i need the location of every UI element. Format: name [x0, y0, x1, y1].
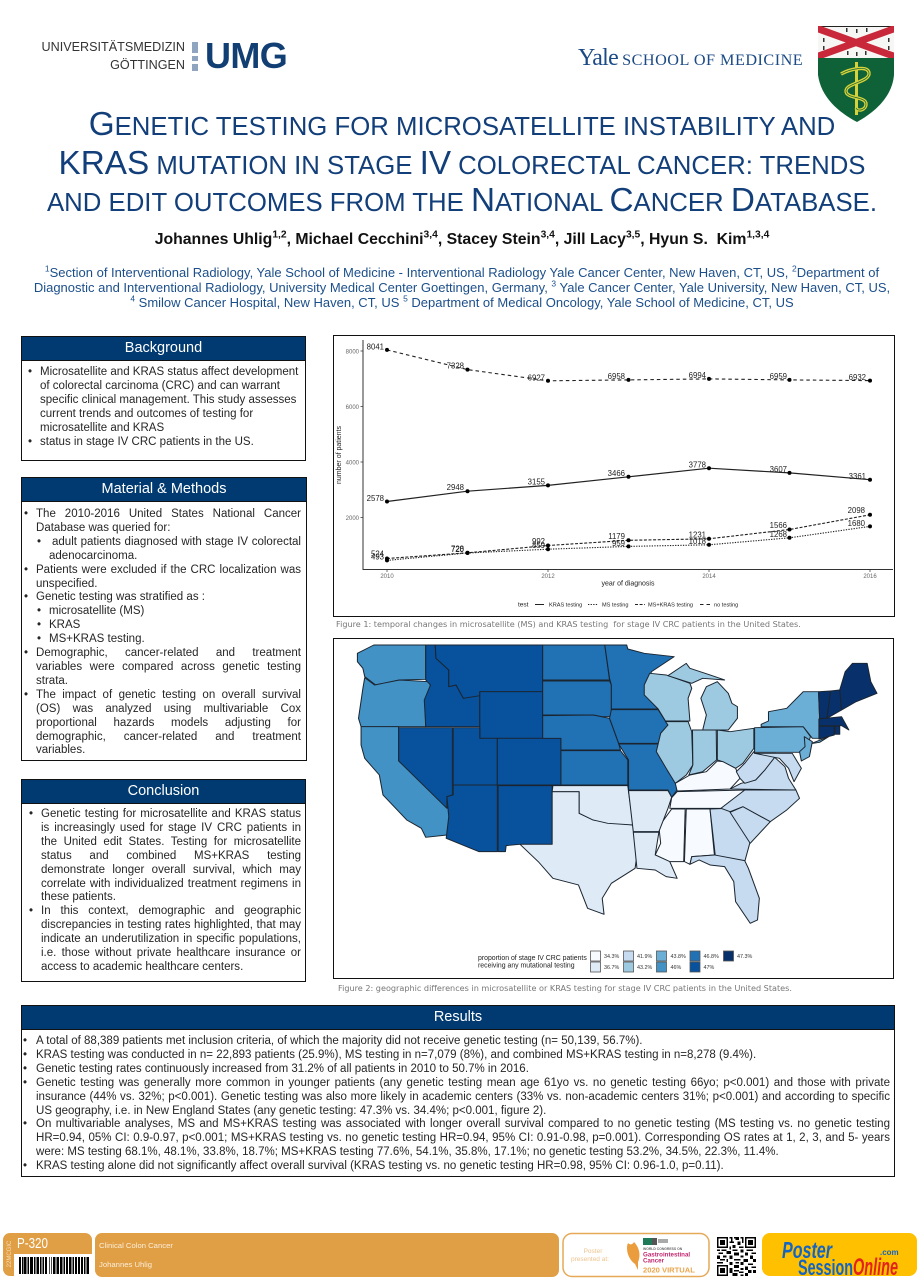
panel: background: [21, 336, 306, 461]
text: methods bullets: proportional hazards models adjusting for: [36, 717, 301, 729]
affiliations: 1Section of Interventional Radiology, Yale School of Medicine - Interventional Radiology Yale Cancer Center, New Haven, CT, US, 2Department of: [45, 264, 879, 280]
text: background bullets: microsatellite and KRAS: [40, 422, 164, 434]
states: 36.7% tier: [520, 786, 677, 914]
chart: testing trends: 2012: [541, 574, 555, 580]
series: KRAS testing: 2948: [447, 483, 464, 492]
text: conclusion bullets: In this context, demographic and geographic: [41, 905, 301, 917]
text: methods bullets: Patients were excluded if the CRC localization was: [36, 564, 301, 576]
text: results bullets: were: MS testing 68.1%, 48.1%, 33.8%, 18.7%; MS+KRAS testing 77.6%, 54.1%, 35.8%, 17.1%; no genetic testing 53.2%, 34.5%, 22.3%, 11.4%.: [36, 1146, 779, 1158]
axis title: x: year of diagnosis: [602, 580, 655, 588]
text: conclusion bullets: status and combined MS+KRAS testing: [41, 850, 301, 862]
chart: testing trends: [336, 340, 893, 608]
panel: material and methods: •: [24, 591, 28, 603]
text: background bullets: of colorectal carcinoma (CRC) and can warrant: [40, 380, 280, 392]
footer: session and author bar: [95, 1233, 559, 1277]
states: 46% tier: [357, 645, 451, 837]
series: MS+KRAS testing: 1231: [689, 530, 706, 540]
series: MS testing: 859: [532, 541, 545, 550]
footer: PosterSessionOnline logo: .com: [880, 1248, 899, 1257]
series: MS testing: 720: [451, 545, 465, 554]
series: MS+KRAS testing: 728: [451, 544, 464, 554]
text: results bullets: insurance (44% vs. 32%; p<0.001). Genetic testing was also more likely in academic centers (33% vs. non-academic centers 31%; p<0.001) and according to specific: [36, 1091, 890, 1103]
panel: material and methods: •: [24, 508, 28, 520]
title: AND EDIT OUTCOMES FROM THE NATIONAL CANCER DATABASE.: [47, 182, 877, 219]
text: conclusion bullets: i.e. those without private healthcare insurance or: [41, 947, 301, 959]
legend: map scale: 36.7%: [604, 965, 619, 971]
footer: congress badge: presented at:: [571, 1256, 609, 1263]
text: methods bullets: microsatellite (MS): [49, 605, 144, 617]
series: no testing: 8041: [367, 342, 384, 352]
heading: conclusion: [22, 780, 305, 804]
heading: background: [22, 337, 305, 361]
title: GENETIC TESTING FOR MICROSATELLITE INSTABILITY AND: [89, 106, 835, 143]
panel: results: [21, 1005, 895, 1177]
text: conclusion bullets: discrepancies in testing rates highlighted, that may: [41, 919, 301, 931]
text: methods bullets: •: [37, 619, 41, 631]
text: conclusion bullets: these patients.: [41, 891, 116, 903]
panel: conclusion: [21, 779, 306, 982]
text: conclusion bullets: indicate an underutilization in specific populations,: [41, 933, 301, 945]
text: methods bullets: Database was queried for:: [36, 522, 170, 534]
affiliations: 4 Smilow Cancer Hospital, New Haven, CT, US 5 Department of Medical Oncology, Yale School of Medicine, CT, US: [130, 294, 794, 310]
panel: background: •: [28, 366, 32, 378]
text: methods bullets: [24, 508, 301, 756]
panel: results: •: [23, 1049, 27, 1061]
series: MS testing: 1680: [848, 519, 866, 528]
chart: testing trends: 2014: [702, 574, 716, 580]
series: no testing: 6959: [770, 372, 787, 381]
legend: map scale: 43.2%: [637, 965, 652, 971]
states: 46.8% tier: [543, 645, 677, 797]
title: KRAS MUTATION IN STAGE IV COLORECTAL CANCER: TRENDS: [58, 145, 865, 182]
authors: Johannes Uhlig1,2, Michael Cecchini3,4, Stacey Stein3,4, Jill Lacy3,5, Hyun S. Kim1,3,4: [155, 230, 769, 248]
icon: Yale shield: [818, 26, 894, 122]
footer: poster id tab: [3, 1233, 92, 1276]
footer: congress badge: [562, 1232, 710, 1278]
text: conclusion bullets: the United edit States. Testing for microsatellite: [41, 836, 301, 848]
panel: results: •: [23, 1118, 27, 1130]
logo: Yale School of Medicine: Yale SCHOOL OF MEDICINE: [578, 45, 803, 71]
text: methods bullets: variables.: [36, 744, 85, 756]
heading: material and methods: Material & Methods: [102, 481, 226, 497]
chart: testing trends: 2016: [863, 574, 877, 580]
logo: UMG: [42, 35, 287, 76]
footer: congress badge: WORLD CONGRESS ON: [643, 1247, 683, 1251]
legend: line types: test: [518, 602, 529, 608]
legend: map scale: 46.8%: [704, 954, 719, 960]
chart: testing trends: 2000: [346, 516, 360, 522]
heading: material and methods: [22, 478, 306, 502]
text: methods bullets: The 2010-2016 United States National Cancer: [36, 508, 301, 520]
text: methods bullets: The impact of genetic testing on overall survival: [36, 689, 301, 701]
panel: background: •: [28, 436, 32, 448]
states: 47.3% tier: [819, 663, 877, 739]
legend: line types: KRAS testing: [549, 602, 582, 608]
panel: results: •: [23, 1035, 27, 1047]
footer: congress badge: Cancer: [643, 1258, 665, 1264]
panel: results: •: [23, 1160, 27, 1172]
text: methods bullets: demographic, cancer-related and treatment: [36, 730, 301, 742]
series: KRAS testing: 3155: [528, 478, 546, 486]
series: MS+KRAS testing: [371, 506, 872, 560]
text: results bullets: Genetic testing rates continuously increased from 31.2% of all patients in 2010 to 50.7% in 2016.: [36, 1063, 529, 1075]
text: methods bullets: unspecified.: [36, 578, 97, 590]
heading: conclusion: Conclusion: [128, 783, 199, 799]
text: methods bullets: variables were compared across genetic testing: [36, 661, 301, 673]
panel: material and methods: •: [24, 689, 28, 701]
text: methods bullets: strata.: [36, 675, 68, 687]
series: MS+KRAS testing: 992: [532, 537, 545, 546]
series: no testing: 6994: [689, 371, 707, 380]
legend: line types: MS+KRAS testing: [648, 602, 693, 608]
text: conclusion bullets: Genetic testing for microsatellite and KRAS status: [41, 808, 301, 820]
series: MS testing: [371, 519, 872, 562]
axis title: y: number of patients: [336, 426, 343, 484]
logo: UMG: UNIVERSITÄTSMEDIZIN: [42, 40, 185, 54]
caption: figure 2: Figure 2: geographic differences in microsatellite or KRAS testing for stage IV CRC patients in the United States.: [338, 983, 792, 993]
series: KRAS testing: [367, 460, 872, 504]
footer: session and author bar: Clinical Colon Cancer: [99, 1241, 173, 1250]
series: MS testing: 493: [371, 552, 384, 562]
text: methods bullets: adult patients diagnosed with stage IV colorectal: [52, 536, 301, 548]
panel: material and methods: [21, 477, 307, 761]
text: methods bullets: Genetic testing was stratified as :: [36, 591, 205, 603]
states: 43.2% tier: [644, 663, 754, 783]
series: KRAS testing: 3361: [849, 472, 866, 481]
heading: results: [22, 1006, 894, 1030]
states: 41.9% tier: [690, 752, 801, 923]
panel: material and methods: •: [24, 564, 28, 576]
text: background bullets: status in stage IV CRC patients in the US.: [40, 436, 254, 448]
text: methods bullets: •: [37, 605, 41, 617]
chart: testing trends: 4000: [346, 460, 360, 466]
series: MS testing: 959: [612, 539, 625, 548]
series: KRAS testing: 3778: [689, 460, 706, 470]
states: 34.3% tier: [655, 761, 747, 864]
text: poster number: P-320: [17, 1236, 48, 1252]
caption: figure 1: Figure 1: temporal changes in microsatellite (MS) and KRAS testing for stage IV CRC patients in the United States.: [336, 619, 801, 629]
chart: testing trends: 2010: [380, 574, 394, 580]
legend: map scale: 46%: [670, 965, 681, 971]
panel: conclusion: •: [29, 905, 33, 917]
text: methods bullets: MS+KRAS testing.: [49, 633, 145, 645]
panel: map figure 2: [333, 638, 894, 979]
legend: map scale: 34.3%: [604, 954, 619, 960]
series: MS+KRAS testing: 1566: [770, 521, 787, 530]
states: 47% tier: [399, 645, 561, 852]
footer: PosterSessionOnline logo: [762, 1233, 917, 1277]
text: conclusion bullets: correlate with individualized treatment regimens in: [41, 878, 301, 890]
legend: map scale: proportion of stage IV CRC patients: [478, 955, 587, 962]
panel: results: •: [23, 1063, 27, 1075]
series: no testing: 6932: [849, 373, 866, 382]
text: methods bullets: adenocarcinoma.: [49, 550, 137, 562]
text: background bullets: specific clinical management. This study assesses: [40, 394, 296, 406]
series: MS testing: 1018: [689, 537, 706, 546]
series: MS+KRAS testing: 1179: [608, 532, 625, 541]
panel: line chart figure 1: [333, 335, 895, 617]
text: background bullets: [28, 366, 298, 448]
text: conclusion bullets: demonstrate longer overall survival, which may: [41, 864, 301, 876]
footer: congress badge: Poster: [584, 1248, 603, 1255]
legend: line types: no testing: [714, 602, 738, 608]
legend: map scale: [478, 951, 752, 972]
legend: map scale: 47%: [704, 965, 714, 971]
panel: conclusion: •: [29, 808, 33, 820]
icon: wheat leaf: [627, 1242, 639, 1270]
affiliations: Diagnostic and Interventional Radiology, University Medical Center Goettingen, Germany, 3 Yale Cancer Center, Yale University, New Haven, CT, US,: [34, 279, 890, 295]
series: no testing: 7328: [447, 362, 464, 370]
footer: session and author bar: Johannes Uhlig: [99, 1260, 152, 1269]
series: MS+KRAS testing: 524: [371, 550, 385, 558]
chart: US state map: [356, 644, 878, 972]
series: no testing: [367, 342, 872, 383]
series: no testing: 6927: [528, 374, 545, 382]
logo: UMG: GÖTTINGEN: [110, 58, 185, 72]
text: methods bullets: •: [37, 536, 41, 548]
text: methods bullets: Demographic, cancer-related and treatment: [36, 647, 301, 659]
chart: testing trends: 6000: [346, 405, 360, 411]
footer: PosterSessionOnline logo: Poster: [782, 1237, 833, 1263]
panel: material and methods: •: [24, 647, 28, 659]
heading: background: Background: [125, 340, 202, 356]
legend: map scale: receiving any mutational testing: [478, 962, 575, 970]
legend: line types: MS testing: [602, 602, 628, 608]
legend: map scale: 43.8%: [670, 954, 686, 960]
text: results bullets: [23, 1035, 890, 1172]
text: methods bullets: KRAS: [49, 619, 80, 631]
text: results bullets: US geography, i.e. in New England States (any genetic testing: 47.3% vs. 34.4%; p<0.001, figure 2).: [36, 1105, 546, 1117]
text: results bullets: KRAS testing alone did not significantly affect overall survival (KRAS testing vs. no genetic testing HR=0.98, 95% CI: 0.96-1.0, p=0.11).: [36, 1160, 724, 1172]
text: results bullets: KRAS testing was conducted in n= 22,893 patients (25.9%), MS testing in n=7,079 (8%), and combined MS+KRAS testing in n=8,278 (9.4%).: [36, 1049, 756, 1061]
states: 43.8% tier: [755, 692, 829, 761]
text: results bullets: HR=0.94, 05% CI: 0.9-0.97, p<0.001; MS+KRAS testing vs. no genetic testing HR=0.94, 95% CI: 0.91-0.98, p=0.001). Corresponding OS rates at 1, 2, 3, and 5- years: [36, 1132, 890, 1144]
text: methods bullets: (OS) was analyzed using multivariable Cox: [36, 703, 301, 715]
heading: results: Results: [434, 1009, 482, 1025]
series: MS testing: 1268: [770, 530, 787, 539]
affiliations: [34, 264, 890, 310]
series: KRAS testing: 3607: [770, 465, 787, 474]
panel: results: •: [23, 1077, 27, 1089]
text: background bullets: Microsatellite and KRAS status affect development: [40, 366, 298, 378]
series: no testing: 6958: [608, 372, 625, 381]
icon: barcode: [14, 1254, 92, 1276]
icon: QR code: [717, 1237, 756, 1276]
footer: congress badge: 2020 VIRTUAL: [643, 1266, 695, 1274]
text: results bullets: Genetic testing was generally more common in younger patients (any genetic testing mean age 61yo vs. no genetic testing 66yo; p<0.001) and those with private: [36, 1077, 890, 1089]
text: background bullets: current trends and outcomes of testing for: [40, 408, 253, 420]
text: conclusion bullets: is increasingly used for stage IV CRC patients in: [41, 822, 301, 834]
logo: UMG: UMG: [205, 35, 287, 76]
text: results bullets: A total of 88,389 patients met inclusion criteria, of which the majority did not receive genetic testing (n= 50,139, 56.7%).: [36, 1035, 643, 1047]
text: conclusion bullets: access to academic healthcare centers.: [41, 961, 243, 973]
footer: congress badge: Gastrointestinal: [643, 1252, 690, 1258]
legend: line types: [518, 602, 738, 608]
text: results bullets: On multivariable analyses, MS and MS+KRAS testing was associated with longer overall survival compared to no genetic testing (MS testing vs. no genetic testing: [36, 1118, 890, 1130]
text: conclusion bullets: [29, 808, 301, 973]
title: [47, 106, 877, 219]
text: methods bullets: •: [37, 633, 41, 645]
legend: map scale: 47.3%: [737, 954, 752, 960]
series: KRAS testing: 2578: [367, 494, 384, 503]
series: MS+KRAS testing: 2098: [848, 506, 865, 515]
legend: map scale: 41.9%: [637, 954, 652, 960]
chart: testing trends: 8000: [346, 350, 360, 356]
text: session code: 22MCGIC: [7, 1241, 13, 1267]
series: KRAS testing: 3466: [608, 469, 625, 478]
